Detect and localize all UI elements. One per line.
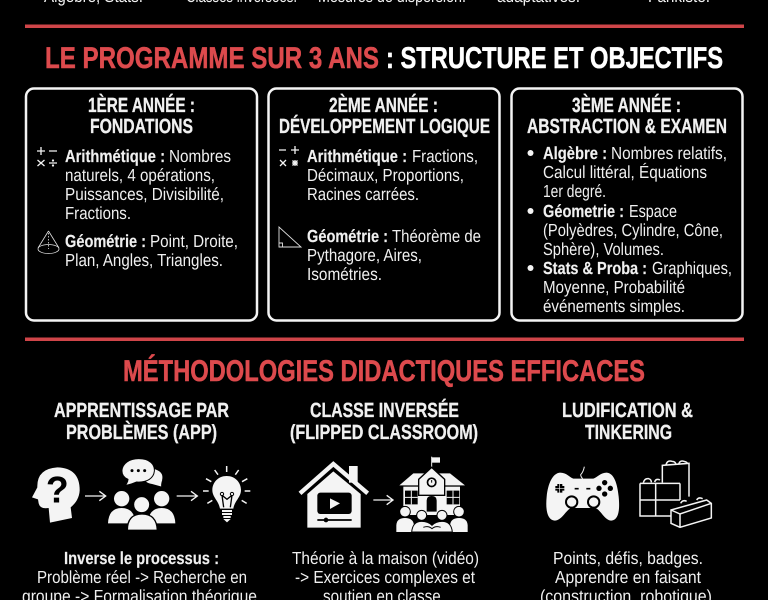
icon: right triangle <box>279 227 301 247</box>
text: arithmétique: naturels, 4 opérations, <box>65 165 215 185</box>
icon: group discussing <box>108 459 175 530</box>
list item: géométrie: Sphère), Volumes. <box>543 239 664 259</box>
description: Problème réel -> Recherche en <box>37 567 247 587</box>
icon: school with students <box>396 457 468 532</box>
text: géométrie: Théorème de <box>392 226 481 246</box>
column heading: (FLIPPED CLASSROOM) <box>290 421 478 444</box>
column heading: APPRENTISSAGE PAR <box>54 399 229 422</box>
column heading <box>290 398 478 444</box>
list item: stats et proba <box>528 258 732 316</box>
text: géométrie: Géométrie : <box>65 231 146 251</box>
list item: algèbre: Calcul littéral, Équations <box>543 162 707 182</box>
column: classe inversée <box>290 398 479 600</box>
description: -> Exercices complexes et <box>295 567 475 587</box>
heading: programme sur 3 ans: LE PROGRAMME SUR 3 ANS <box>45 42 379 75</box>
heading: programme sur 3 ans <box>45 42 723 75</box>
column heading: PROBLÈMES (APP) <box>66 420 217 444</box>
list item: stats et proba: Moyenne, Probabilité <box>543 277 685 297</box>
column: apprentissage par problèmes <box>22 399 257 600</box>
column heading: TINKERING <box>585 421 672 444</box>
card title: abstraction et examen: 3ÈME ANNÉE : <box>572 93 681 117</box>
icons: game controller and bricks <box>546 461 711 527</box>
icon: arithmetic operators <box>279 146 299 166</box>
card title: abstraction et examen <box>527 93 727 138</box>
card title: développement logique: DÉVELOPPEMENT LOGIQUE <box>279 114 490 138</box>
list item: stats et proba: Graphiques, <box>652 258 732 278</box>
list item: géométrie: (Polyèdres, Cylindre, Cône, <box>543 220 723 240</box>
card title: développement logique <box>279 93 490 138</box>
column heading: LUDIFICATION & <box>562 399 693 422</box>
card title: fondations: FONDATIONS <box>90 115 193 138</box>
text: géométrie: Géométrie : <box>307 226 388 246</box>
column: ludification et tinkering <box>540 399 712 600</box>
icon: cone <box>38 231 59 254</box>
list item: stats et proba: Stats & Proba : <box>543 258 647 278</box>
icon: head with question mark: ? <box>46 469 69 510</box>
text: arithmétique: Arithmétique : <box>307 146 407 166</box>
text: arithmétique: Puissances, Divisibilité, <box>65 184 224 204</box>
icon: arithmetic operators <box>37 147 57 166</box>
text: arithmétique: Décimaux, Proportions, <box>307 165 464 185</box>
arrow <box>177 491 197 501</box>
arrow <box>373 495 393 505</box>
column heading <box>562 399 693 444</box>
list item: géométrie: Géometrie : <box>543 201 624 221</box>
text: géométrie: Isométries. <box>307 264 382 284</box>
card title: fondations <box>88 93 195 138</box>
clipped captions of previous section <box>44 0 710 6</box>
icon: head with question mark <box>32 467 80 523</box>
text: arithmétique <box>65 146 231 223</box>
list item: algèbre: Algèbre : <box>543 143 607 163</box>
description: Points, défis, badges. <box>553 548 703 568</box>
list item: géométrie <box>528 201 723 259</box>
text: arithmétique: Fractions, <box>412 146 478 166</box>
column heading: CLASSE INVERSÉE <box>310 398 459 422</box>
icon: process from head to group to lightbulb <box>32 459 250 530</box>
description: Apprendre en faisant <box>555 567 701 587</box>
card title: développement logique: 2ÈME ANNÉE : <box>329 93 438 117</box>
text: géométrie: Point, Droite, <box>150 231 238 251</box>
icon: lightbulb <box>203 466 250 522</box>
description: Inverse le processus : <box>64 548 219 568</box>
text: géométrie <box>65 231 238 270</box>
description <box>22 548 257 600</box>
heading: méthodologies didactiques: MÉTHODOLOGIES DIDACTIQUES EFFICACES <box>123 354 645 388</box>
list item: algèbre: Nombres relatifs, <box>611 143 727 163</box>
list item: algèbre <box>528 143 727 201</box>
panel: 3ème année <box>512 88 742 320</box>
text: arithmétique: Nombres <box>169 146 231 166</box>
text: arithmétique <box>307 146 478 204</box>
icons: house to school <box>300 457 468 532</box>
icon: game controller <box>546 467 619 521</box>
text: arithmétique: Arithmétique : <box>65 146 165 166</box>
description <box>292 548 479 600</box>
list item: algèbre: 1er degré. <box>543 181 606 201</box>
text: géométrie: Plan, Angles, Triangles. <box>65 250 223 270</box>
text: géométrie <box>307 226 481 284</box>
list item: géométrie: Espace <box>629 201 677 221</box>
arrow <box>85 491 106 501</box>
list item: stats et proba: événements simples. <box>543 296 685 316</box>
description <box>540 548 712 600</box>
card title: fondations: 1ÈRE ANNÉE : <box>88 93 195 117</box>
panel: 1ère année <box>26 88 257 320</box>
icon: house with video <box>300 464 368 528</box>
column heading <box>54 399 229 444</box>
text: géométrie: Pythagore, Aires, <box>307 245 422 265</box>
description: Théorie à la maison (vidéo) <box>292 548 479 568</box>
icon: building bricks <box>640 461 711 527</box>
text: arithmétique: Fractions. <box>65 203 131 223</box>
panel: 2ème année <box>268 88 500 320</box>
text: arithmétique: Racines carrées. <box>307 184 419 204</box>
